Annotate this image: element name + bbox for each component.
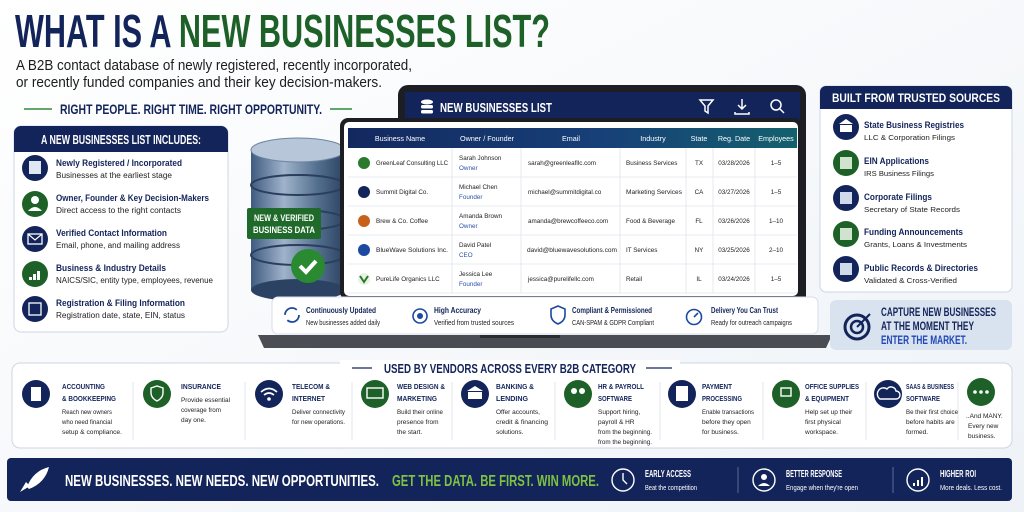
bottom bar: GET THE DATA. BE FIRST. WIN MORE.: [392, 473, 599, 490]
bottom bar: Engage when they're open: [786, 483, 858, 492]
panel: vendors: business.: [968, 433, 996, 440]
item: owner: Owner, Founder & Key Decision-Makers: [56, 193, 209, 204]
panel: trusted sources: Validated & Cross-Verified: [864, 276, 957, 285]
table: Sarah Johnson: [459, 155, 502, 162]
panel: trusted sources: IRS Business Filings: [864, 169, 934, 178]
bottom bar: EARLY ACCESS: [645, 469, 691, 480]
table: Retail: [626, 276, 642, 283]
panel: vendors: WEB DESIGN &: [397, 382, 445, 391]
panel: vendors: Offer accounts,: [496, 409, 540, 416]
item: contact: [22, 226, 180, 252]
panel: trusted sources: EIN Applications: [864, 156, 929, 166]
table: IT Services: [626, 247, 657, 254]
panel: trusted sources: LLC & Corporation Filings: [864, 133, 955, 142]
item: contact: Verified Contact Information: [56, 228, 167, 239]
panel: vendors: formed.: [906, 429, 928, 436]
panel: vendors: & EQUIPMENT: [805, 394, 849, 403]
table: FL: [695, 218, 703, 225]
icon: database: [251, 138, 345, 301]
table: jessica@purelifellc.com: [527, 276, 594, 283]
badge: new & verified: BUSINESS DATA: [253, 225, 315, 235]
panel: trusted sources: Grants, Loans & Investments: [864, 240, 967, 249]
table: CA: [695, 189, 704, 196]
feature: updated: [285, 305, 380, 327]
icons: filter download search: [700, 99, 784, 114]
table: Email: [562, 134, 580, 143]
feature: delivery: Delivery You Can Trust: [711, 305, 778, 315]
table: Amanda Brown: [459, 213, 503, 220]
panel: vendors: Support hiring,: [598, 409, 640, 416]
table: 1–10: [769, 218, 783, 225]
table: david@bluewavesolutions.com: [527, 247, 617, 254]
panel: includes: A NEW BUSINESSES LIST INCLUDES:: [41, 133, 201, 147]
table: 1–5: [771, 189, 782, 196]
panel: vendors: ACCOUNTING: [62, 382, 105, 391]
panel: vendors: from the beginning.: [598, 439, 652, 446]
bottom bar: More deals. Less cost.: [940, 483, 1002, 492]
subtitle: [16, 58, 412, 91]
table: Brew & Co. Coffee: [376, 218, 429, 225]
subtitle: A B2B contact database of newly registered, recently incorporated,: [16, 58, 412, 74]
table: IL: [696, 276, 702, 283]
callout: capture: [830, 300, 1012, 350]
table: 03/28/2026: [718, 160, 750, 167]
table: Michael Chen: [459, 184, 498, 191]
bottom bar: [7, 458, 1012, 501]
bottom bar: BETTER RESPONSE: [786, 469, 842, 480]
item: industry: NAICS/SIC, entity type, employees, revenue: [56, 276, 214, 285]
callout: capture: AT THE MOMENT THEY: [881, 321, 974, 333]
feature: accuracy: Verified from trusted sources: [434, 320, 514, 327]
panel: vendors: Provide essential: [181, 397, 231, 404]
panel: vendors: coverage from: [181, 407, 221, 414]
feature: delivery: [686, 305, 792, 327]
table: sarah@greenleafllc.com: [528, 160, 596, 167]
item: registration: Registration & Filing Information: [56, 298, 185, 309]
panel: vendors: INSURANCE: [181, 382, 221, 391]
feature: compliant: Compliant & Permissioned: [572, 305, 652, 315]
panel: vendors: OFFICE SUPPLIES: [805, 382, 859, 391]
panel: vendors: for business.: [702, 429, 739, 436]
item: newly registered: Businesses at the earliest stage: [56, 171, 173, 180]
title: WHAT IS A NEW BUSINESSES LIST?: [15, 5, 550, 57]
panel: vendors: setup & compliance.: [62, 429, 122, 436]
item: registration: Registration date, state, EIN, status: [56, 311, 185, 320]
table: Jessica Lee: [459, 271, 493, 278]
table: 1–5: [771, 160, 782, 167]
panel: vendors: INTERNET: [292, 394, 325, 403]
feature strip: [272, 297, 818, 334]
panel: trusted sources: [820, 86, 1012, 292]
panel: vendors: Deliver connectivity: [292, 409, 346, 416]
panel: trusted sources: Funding Announcements: [864, 227, 963, 237]
feature: updated: New businesses added daily: [306, 320, 380, 327]
panel: vendors: USED BY VENDORS ACROSS EVERY B2B CATEGORY: [384, 362, 637, 376]
feature: updated: Continuously Updated: [306, 305, 376, 315]
table: Owner: [459, 165, 478, 172]
table: Reg. Date: [718, 134, 750, 143]
table: NY: [695, 247, 704, 254]
bottom bar: Beat the competition: [645, 483, 697, 492]
panel: vendors: who need financial: [61, 419, 113, 426]
table: Business Services: [626, 160, 677, 167]
panel: vendors: Every new: [968, 423, 999, 430]
bottom bar: NEW BUSINESSES. NEW NEEDS. NEW OPPORTUNITIES.: [65, 473, 379, 490]
panel: vendors: SAAS & BUSINESS: [906, 382, 954, 391]
table: Founder: [459, 281, 482, 288]
icon: check: [291, 249, 325, 283]
table: Owner / Founder: [460, 134, 515, 143]
panel: vendors: TELECOM &: [292, 382, 330, 391]
item: owner: [22, 191, 209, 217]
panel: vendors: workspace.: [804, 429, 838, 436]
panel: vendors: solutions.: [496, 429, 524, 436]
item: contact: Email, phone, and mailing address: [56, 241, 180, 250]
panel: vendors: LENDING: [496, 394, 528, 403]
panel: trusted sources: Secretary of State Records: [864, 205, 960, 214]
panel: vendors: Build their online: [397, 409, 443, 416]
panel: vendors: BANKING &: [496, 382, 535, 391]
table: Industry: [640, 134, 666, 143]
table: PureLife Organics LLC: [376, 276, 440, 283]
laptop back screen: [398, 85, 806, 307]
item: newly registered: Newly Registered / Incorporated: [56, 158, 182, 169]
tagline: RIGHT PEOPLE. RIGHT TIME. RIGHT OPPORTUNITY.: [60, 101, 322, 117]
panel: vendors: & BOOKKEEPING: [62, 394, 116, 403]
table: 03/26/2026: [718, 218, 750, 225]
table: Owner: [459, 223, 478, 230]
table: 03/24/2026: [718, 276, 750, 283]
feature: accuracy: [413, 305, 514, 327]
icon: rocket: [20, 467, 49, 492]
panel: vendors: HR & PAYROLL: [598, 382, 644, 391]
panel: vendors: before they open: [702, 419, 751, 426]
feature: compliant: CAN-SPAM & GDPR Compliant: [572, 320, 654, 327]
table: michael@summitdigital.co: [528, 189, 602, 196]
table: Marketing Services: [626, 189, 682, 196]
subtitle: or recently funded companies and their key decision-makers.: [16, 75, 382, 91]
laptop base: [258, 335, 832, 348]
badge: new & verified: NEW & VERIFIED: [254, 213, 314, 223]
panel: vendors: Be their first choice: [906, 409, 958, 416]
panel: vendors: PAYMENT: [702, 382, 732, 391]
item: industry: Business & Industry Details: [56, 263, 166, 274]
item: registration: [22, 296, 185, 322]
table: Business Name: [375, 134, 425, 143]
panel: vendors: payroll & HR: [598, 419, 635, 426]
feature: compliant: [551, 305, 654, 327]
panel: vendors: from the beginning.: [598, 429, 652, 436]
panel: trusted sources: State Business Registries: [864, 120, 964, 130]
item: newly registered: [22, 155, 182, 181]
table: [340, 118, 802, 300]
callout: capture: ENTER THE MARKET.: [881, 335, 967, 347]
panel: vendors: SOFTWARE: [906, 394, 940, 403]
panel: vendors: day one.: [181, 417, 206, 424]
panel: vendors: [12, 360, 1012, 448]
panel: vendors: Enable transactions: [702, 409, 755, 416]
panel: vendors: the start.: [397, 429, 422, 436]
panel: vendors: PROCESSING: [702, 394, 742, 403]
panel: vendors: credit & financing: [496, 419, 548, 426]
badge: new & verified: [247, 208, 321, 239]
panel: trusted sources: Public Records & Directories: [864, 263, 978, 273]
feature: delivery: Ready for outreach campaigns: [711, 320, 792, 327]
panel: vendors: for new operations.: [292, 419, 345, 426]
table: CEO: [459, 252, 473, 259]
table: amanda@brewcoffeeco.com: [528, 218, 608, 225]
table: 03/25/2026: [718, 247, 750, 254]
panel: vendors: first physical: [805, 419, 841, 426]
table: Summit Digital Co.: [376, 189, 428, 196]
table: David Patel: [459, 242, 491, 249]
panel: vendors: ..And MANY.: [966, 413, 1003, 420]
panel: vendors: presence from: [397, 419, 439, 426]
table: 03/27/2026: [718, 189, 750, 196]
table: TX: [695, 160, 704, 167]
panel: vendors: Help set up their: [805, 409, 853, 416]
table: Founder: [459, 194, 482, 201]
item: owner: Direct access to the right contacts: [56, 206, 181, 215]
panel: vendors: SOFTWARE: [598, 394, 632, 403]
table: State: [691, 134, 707, 143]
table: GreenLeaf Consulting LLC: [376, 160, 448, 167]
panel: vendors: MARKETING: [397, 394, 437, 403]
table: Food & Beverage: [626, 218, 676, 225]
bottom bar: HIGHER ROI: [940, 469, 976, 480]
table: 2–10: [769, 247, 783, 254]
panel: vendors: Reach new owners: [62, 409, 113, 416]
table: Employees: [758, 134, 794, 143]
icon: db small: [421, 100, 433, 114]
laptop back screen: NEW BUSINESSES LIST: [440, 100, 552, 115]
panel: trusted sources: BUILT FROM TRUSTED SOURCES: [832, 91, 1000, 105]
panel: vendors: before habits are: [906, 419, 955, 426]
table: 1–5: [771, 276, 782, 283]
feature: accuracy: High Accuracy: [434, 305, 481, 315]
item: industry: [22, 261, 214, 287]
panel: trusted sources: Corporate Filings: [864, 192, 932, 202]
panel: includes: [14, 126, 228, 332]
table: BlueWave Solutions Inc.: [376, 247, 448, 254]
